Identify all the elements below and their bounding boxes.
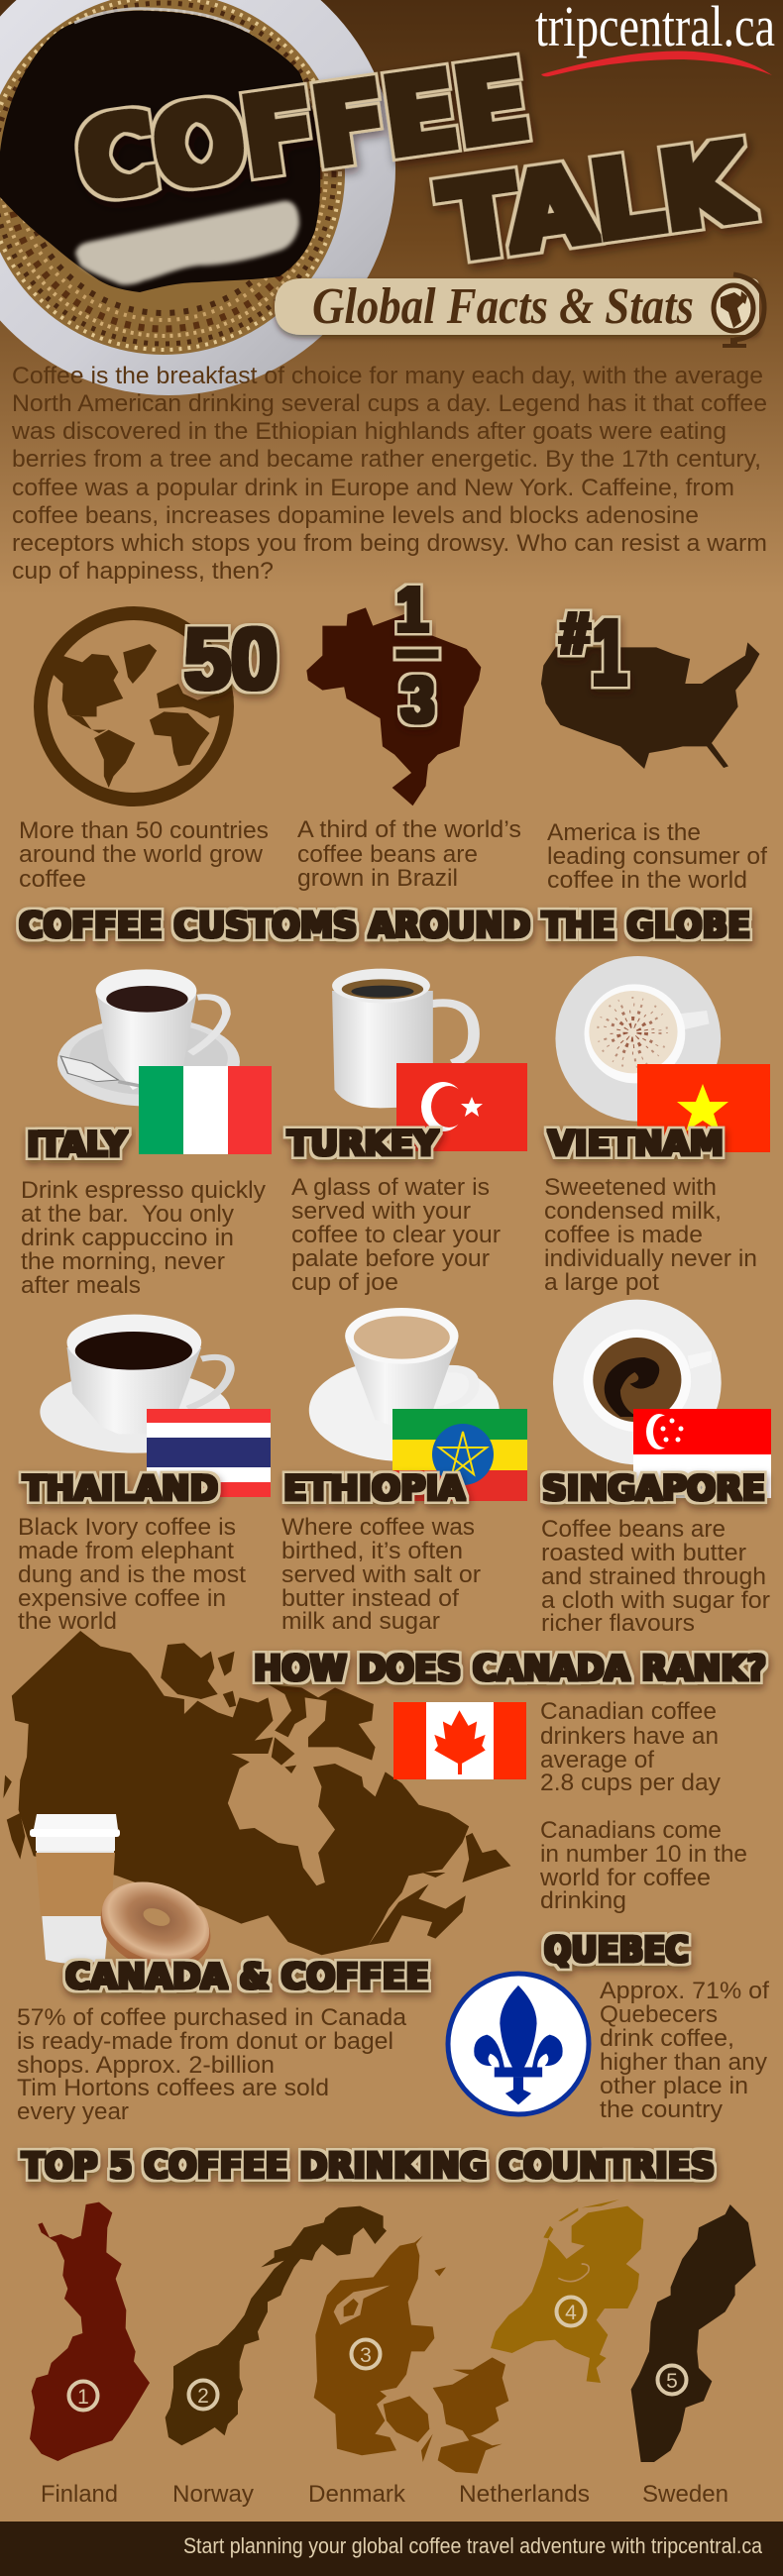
- illustration: singapore cup: [553, 1300, 722, 1464]
- country labels: Sweden: [642, 2481, 728, 2508]
- rank badges: [69, 2297, 686, 2410]
- illustration: donut: [88, 1868, 223, 1985]
- text: quebec: [600, 1978, 769, 2123]
- stat text: america: [547, 819, 767, 894]
- illustration: ethiopia cup: [309, 1308, 500, 1461]
- flag: canada: [393, 1702, 526, 1779]
- stat text: brazil: grown in Brazil: [297, 865, 458, 892]
- stat: world map ring: [41, 613, 234, 800]
- text: canada average: average of: [540, 1747, 654, 1773]
- text: singapore: a cloth with sugar for: [541, 1587, 770, 1614]
- text: canada and coffee: every year: [17, 2098, 129, 2125]
- stat number: one third: 3: [401, 663, 434, 736]
- intro paragraph: North American drinking several cups a day. Legend has it that coffee: [12, 390, 767, 417]
- text: quebec: other place in: [600, 2073, 748, 2099]
- text: italy: after meals: [21, 1272, 141, 1299]
- intro paragraph: Coffee is the breakfast of choice for many each day, with the average: [12, 363, 763, 389]
- flag: thailand: [147, 1409, 271, 1497]
- text: italy: Drink espresso quickly: [21, 1177, 266, 1204]
- icon: globe: [714, 274, 764, 348]
- flag: italy: [139, 1066, 272, 1154]
- country labels: [41, 2481, 728, 2508]
- intro paragraph: cup of happiness, then?: [12, 558, 274, 585]
- stat: usa map: [541, 642, 759, 769]
- text: canada average: drinkers have an: [540, 1723, 719, 1750]
- text: canada average: 2.8 cups per day: [540, 1770, 721, 1796]
- text: quebec: higher than any: [600, 2049, 767, 2076]
- illustration: takeaway cup: [30, 1814, 120, 1964]
- text: ethiopia: milk and sugar: [281, 1608, 440, 1635]
- flag: vietnam: [637, 1064, 770, 1152]
- intro paragraph: [11, 363, 767, 585]
- text: canada and coffee: [17, 2004, 407, 2125]
- rank badges: 4: [565, 2302, 577, 2324]
- subtitle banner: global facts and stats: Global Facts & Stats: [312, 278, 694, 335]
- text: vietnam: [544, 1174, 757, 1296]
- title: coffee: COFFEE: [70, 39, 535, 224]
- intro paragraph: was discovered in the Ethiopian highlands after goats were eating: [11, 418, 727, 445]
- illustration: thailand cup: [40, 1315, 230, 1453]
- text: vietnam: condensed milk,: [544, 1198, 722, 1225]
- text: ethiopia: served with salt or: [281, 1561, 481, 1588]
- text: italy: drink cappuccino in: [21, 1225, 234, 1251]
- coffee cup top view: [0, 0, 395, 395]
- text: italy: at the bar. You only: [21, 1201, 234, 1228]
- illustration: vietnam cup: [555, 956, 721, 1122]
- text: canada ranking: world for coffee: [539, 1865, 711, 1891]
- text: thailand: [18, 1514, 246, 1635]
- text: quebec: Quebecers: [600, 2001, 718, 2028]
- country name: ethiopia: ETHIOPIA: [283, 1469, 465, 1509]
- country name: italy: ITALY: [27, 1126, 128, 1165]
- stat number: one third: [394, 574, 440, 736]
- text: singapore: richer flavours: [541, 1610, 695, 1637]
- text: thailand: dung and is the most: [18, 1561, 246, 1588]
- text: turkey: [291, 1174, 501, 1296]
- rank badges: 2: [197, 2385, 209, 2408]
- text: thailand: made from elephant: [18, 1538, 234, 1564]
- flag: singapore: [633, 1409, 771, 1498]
- text: vietnam: a large pot: [544, 1269, 659, 1296]
- stat text: countries: coffee: [19, 866, 86, 893]
- text: canada average: Canadian coffee: [540, 1698, 717, 1725]
- text: canada and coffee: shops. Approx. 2-billion: [17, 2052, 275, 2079]
- text: vietnam: coffee is made: [544, 1222, 703, 1248]
- footer: [0, 2522, 783, 2576]
- text: thailand: Black Ivory coffee is: [18, 1514, 236, 1541]
- illustration: italy cup: [57, 969, 240, 1107]
- country name: singapore: SINGAPORE: [542, 1469, 765, 1509]
- text: italy: [21, 1177, 266, 1299]
- country labels: Denmark: [308, 2481, 406, 2508]
- text: canada average: [540, 1698, 721, 1796]
- text: canada and coffee: Tim Hortons coffees are sold: [17, 2075, 329, 2101]
- text: canada ranking: drinking: [540, 1887, 626, 1914]
- text: singapore: roasted with butter: [541, 1540, 746, 1566]
- country name: turkey: TURKEY: [287, 1125, 439, 1164]
- stat text: america: coffee in the world: [547, 867, 747, 894]
- text: quebec: drink coffee,: [600, 2025, 734, 2052]
- stat number: 50: 50: [184, 609, 278, 707]
- subtitle banner: global facts and stats: [275, 274, 764, 348]
- text: italy: the morning, never: [21, 1248, 225, 1275]
- country labels: Netherlands: [459, 2481, 590, 2508]
- country labels: Norway: [172, 2481, 254, 2508]
- text: vietnam: Sweetened with: [544, 1174, 717, 1201]
- text: vietnam: individually never in: [544, 1245, 757, 1272]
- title: talk: TALK: [434, 121, 758, 285]
- text: ethiopia: butter instead of: [281, 1585, 459, 1612]
- stat text: countries: [19, 817, 269, 893]
- country name: vietnam: VIETNAM: [548, 1125, 724, 1164]
- emblem: quebec fleur-de-lis: [448, 1974, 589, 2114]
- text: singapore: Coffee beans are: [541, 1516, 726, 1543]
- text: turkey: cup of joe: [291, 1269, 398, 1296]
- intro paragraph: receptors which stops you from being drowsy. Who can resist a warm: [12, 530, 767, 557]
- text: ethiopia: Where coffee was: [281, 1514, 475, 1541]
- rank badges: 3: [360, 2344, 372, 2367]
- text: turkey: palate before your: [291, 1245, 490, 1272]
- heading: coffee customs: COFFEE CUSTOMS AROUND THE GLOBE: [19, 906, 750, 946]
- text: turkey: coffee to clear your: [291, 1222, 501, 1248]
- text: canada ranking: in number 10 in the: [540, 1841, 747, 1868]
- map: canada: [3, 1631, 510, 1955]
- stat text: america: leading consumer of: [547, 843, 767, 870]
- map: finland: [30, 2202, 150, 2461]
- text: ethiopia: [281, 1514, 481, 1635]
- text: thailand: expensive coffee in: [18, 1585, 226, 1612]
- stat text: brazil: coffee beans are: [297, 841, 478, 868]
- stat text: countries: More than 50 countries: [19, 817, 269, 844]
- text: quebec: Approx. 71% of: [600, 1978, 769, 2004]
- rank badges: 5: [666, 2370, 678, 2393]
- text: ethiopia: birthed, it’s often: [281, 1538, 463, 1564]
- map: sweden: [631, 2204, 756, 2462]
- text: turkey: A glass of water is: [291, 1174, 490, 1201]
- flag: ethiopia: [392, 1409, 527, 1501]
- country name: thailand: THAILAND: [23, 1469, 218, 1509]
- stat number: #1: #: [560, 601, 590, 666]
- stat text: brazil: [297, 816, 521, 892]
- stat number: one third: 1: [396, 574, 428, 645]
- map: denmark: [314, 2236, 508, 2474]
- text: quebec: the country: [600, 2096, 723, 2123]
- intro paragraph: coffee was a popular drink in Europe and New York. Caffeine, from: [12, 475, 734, 501]
- text: thailand: the world: [18, 1608, 117, 1635]
- stat number: #1: 1: [593, 600, 626, 705]
- stat text: countries: around the world grow: [19, 841, 264, 868]
- map: norway: [166, 2206, 387, 2445]
- intro paragraph: coffee beans, increases dopamine levels and blocks adenosine: [12, 502, 699, 529]
- heading: top 5: TOP 5 COFFEE DRINKING COUNTRIES: [22, 2146, 715, 2187]
- illustration: turkey mug: [332, 969, 474, 1108]
- stat text: america: America is the: [547, 819, 701, 846]
- text: canada and coffee: is ready-made from donut or bagel: [17, 2028, 393, 2055]
- text: canada and coffee: 57% of coffee purchased in Canada: [17, 2004, 407, 2031]
- text: singapore: [541, 1516, 770, 1637]
- heading: quebec: QUEBEC: [544, 1930, 689, 1971]
- rank badges: 1: [77, 2386, 89, 2409]
- stat number: #1: [560, 600, 626, 705]
- text: canada ranking: Canadians come: [540, 1817, 722, 1844]
- country labels: Finland: [41, 2481, 118, 2508]
- text: singapore: and strained through: [541, 1563, 766, 1590]
- flag: turkey: [396, 1063, 527, 1151]
- heading: canada and coffee: CANADA & COFFEE: [65, 1957, 429, 1997]
- text: turkey: served with your: [291, 1198, 471, 1225]
- text: canada ranking: [539, 1817, 747, 1914]
- intro paragraph: berries from a tree and became rather energetic. By the 17th century,: [12, 446, 761, 473]
- map: netherlands: [491, 2200, 643, 2383]
- stat: brazil map: [306, 607, 481, 805]
- stat text: brazil: A third of the world’s: [297, 816, 521, 843]
